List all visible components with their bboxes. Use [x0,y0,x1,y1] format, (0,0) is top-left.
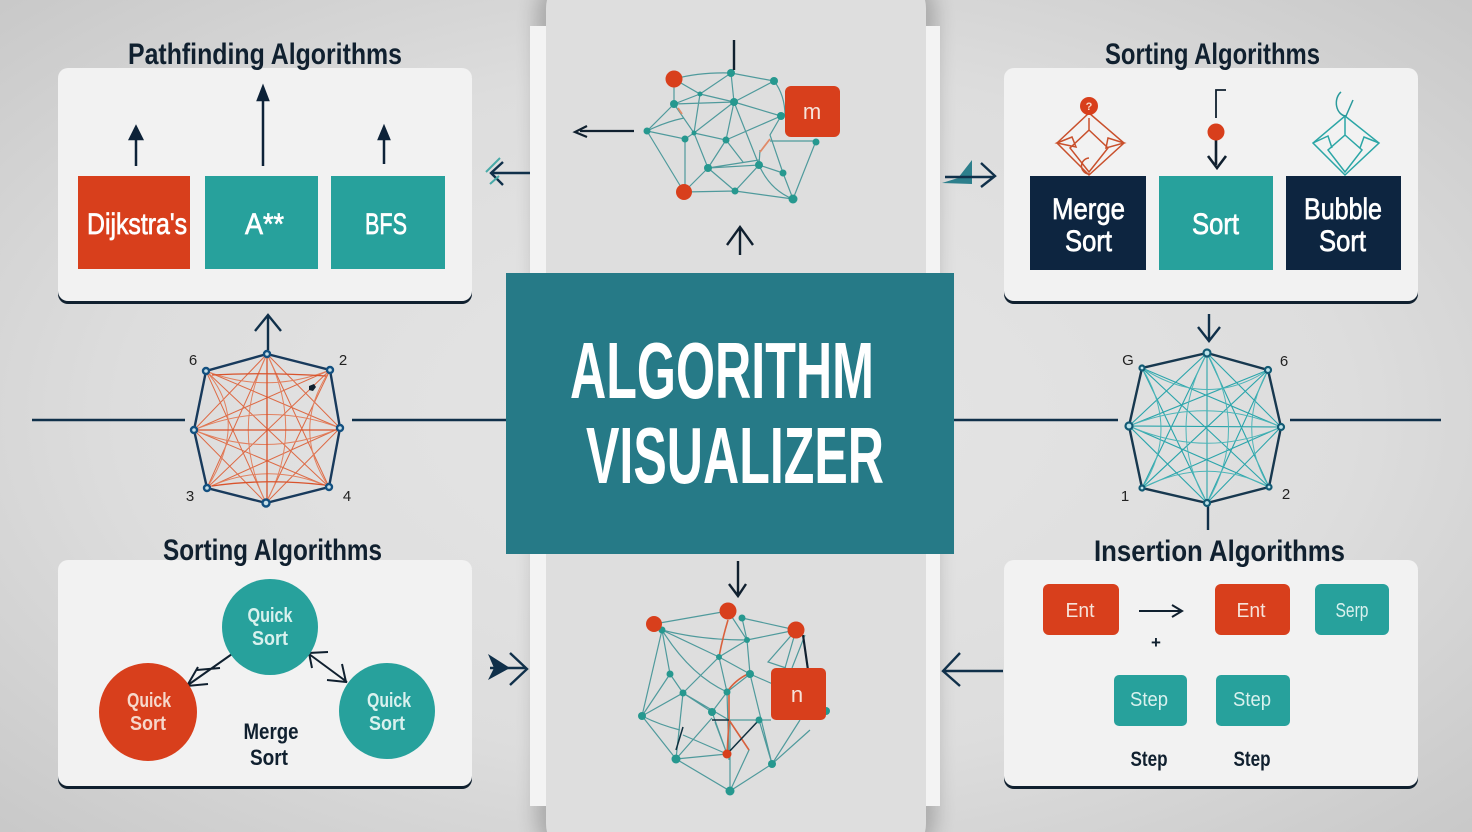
box: m: m [803,99,821,124]
arrow: top graph left [575,126,634,137]
octagon graph: orange: 3 [186,488,194,505]
arrows: between quick sort circles [187,652,347,686]
title line 2: VISUALIZER [586,411,884,500]
label: Step right: Step [1234,748,1270,771]
node: quick sort right [339,663,435,759]
arrow: above A* [258,87,268,166]
node: red left [646,616,662,632]
node: red top [666,70,682,88]
arrow: up to pathfinding panel [255,315,281,350]
label: merge sort: Merge [244,719,298,744]
node: red centre [720,602,736,620]
box: Merge Sort: Sort [1065,225,1113,258]
network graph: bottom centre [638,602,830,796]
box: Ent right: Ent [1236,600,1266,622]
box: Merge Sort: Merge [1052,193,1125,226]
box: A* [205,176,318,269]
octagon graph: teal: 1 [1121,488,1129,505]
node: quick sort right: Quick [367,690,412,712]
label: merge sort [244,719,298,770]
arrow: Ent to Ent [1139,605,1182,617]
label: Step left: Step [1130,748,1168,771]
box: Ent left: Ent [1066,600,1095,622]
box: Step right: Step [1233,689,1271,711]
node: quick sort top [222,579,318,675]
heading: sorting algorithms top right: Sorting Algorithms [1105,38,1320,71]
box: n: n [791,682,803,707]
node: quick sort left: Quick [127,690,172,712]
connector lines: right [954,420,1441,530]
box: Step left: Step [1130,689,1168,711]
arrow: down from sorting panel [1198,314,1220,341]
octagon graph: teal: 2 [1282,486,1290,503]
line: above top graph [733,40,735,70]
arrow: bottom graph down [729,561,746,596]
heading: pathfinding algorithms: Pathfinding Algorithms [128,38,402,71]
heading: sorting algorithms bottom left: Sorting Algorithms [163,534,382,567]
node: quick sort left [99,663,197,761]
box: BFS [331,176,445,269]
network graph: top centre [644,69,820,204]
octagon graph: teal: 6 [1280,353,1288,370]
node: quick sort top: Sort [252,628,288,650]
icon: sort arrow with node [1208,90,1226,168]
node: red right [788,622,804,638]
box: BFS: BFS [365,208,407,241]
octagon graph: orange: 6 [189,352,197,369]
box: Dijkstra's [78,176,190,269]
arrow: top graph up [727,227,753,255]
box: Step right [1216,675,1290,726]
icon: orange diamond network: ? [1086,101,1093,113]
node: red bottom [676,184,692,200]
box: Dijkstra's: Dijkstra's [87,208,187,241]
box: Sort [1159,176,1273,270]
arrow: to pathfinding panel [486,158,530,185]
box: Sort: Sort [1192,208,1240,241]
box: Bubble Sort: Sort [1319,225,1367,258]
panel: sorting algorithms bottom left [58,560,472,789]
panel: sorting algorithms top right [1004,68,1418,304]
panel: centre column [530,0,940,832]
heading: insertion algorithms: Insertion Algorithms [1094,535,1345,568]
octagon graph: orange: 4 [343,488,351,505]
octagon graph: teal: G [1122,352,1134,369]
box: Serp: Serp [1336,600,1368,622]
box: Ent left [1043,584,1119,635]
icon: orange diamond network [1057,97,1124,175]
box: Bubble Sort: Bubble [1304,193,1382,226]
box: Merge Sort [1030,176,1146,270]
plus sign: + [1151,633,1161,652]
arrow: above BFS [379,127,389,164]
octagon graph: orange: 2 [339,352,347,369]
label: merge sort: Sort [250,745,289,770]
panel: insertion algorithms [1004,560,1418,789]
box: Ent right [1215,584,1290,635]
octagon graph: orange [186,351,351,506]
octagon graph: teal [1121,350,1290,506]
node: quick sort left: Sort [130,713,166,735]
panel: pathfinding algorithms [58,68,472,304]
arrow: from insertion panel [943,653,1003,686]
node: quick sort right: Sort [369,713,405,735]
box: A*: A** [245,208,284,241]
box: Step left [1114,675,1187,726]
box: Bubble Sort [1286,176,1401,270]
title block [506,273,954,554]
arrow: above Dijkstra's [130,127,142,166]
icon: teal diamond network [1313,92,1379,175]
box: m [785,86,840,137]
box: n [771,668,826,720]
arrow: from bottom-left panel [472,653,527,685]
box: Serp [1315,584,1389,635]
arrow: to sorting panel [942,160,995,187]
title line 1: ALGORITHM [570,326,874,415]
node: quick sort top: Quick [248,605,293,627]
connector lines: left [32,419,506,421]
